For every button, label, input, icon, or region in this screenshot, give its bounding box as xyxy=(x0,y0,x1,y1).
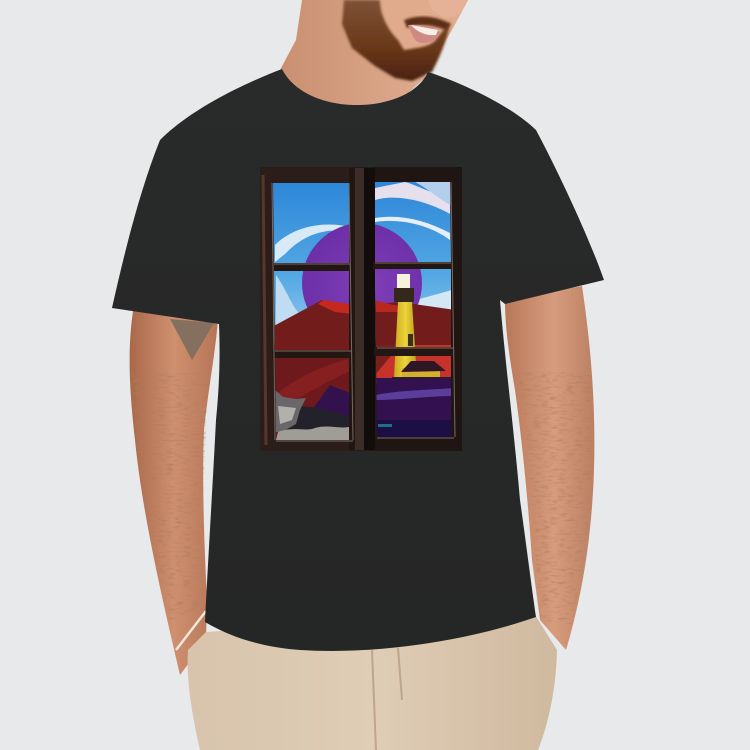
red hills xyxy=(274,300,451,350)
figure: man wearing t-shirt xyxy=(112,0,604,750)
bracelet xyxy=(176,611,206,650)
purple foreground xyxy=(376,378,451,428)
red ground right xyxy=(376,345,451,385)
cottage xyxy=(392,361,452,379)
frame highlights xyxy=(272,182,455,441)
right arm hair xyxy=(518,372,593,625)
window frame xyxy=(260,167,462,451)
glazing bars xyxy=(272,262,455,358)
tattoo xyxy=(170,319,214,360)
lighthouse xyxy=(392,274,452,379)
purple moon xyxy=(302,223,422,343)
cat xyxy=(275,390,353,440)
sky swirls xyxy=(275,224,345,262)
window backing xyxy=(260,167,462,451)
scene xyxy=(273,182,451,440)
nose xyxy=(428,0,466,18)
right arm xyxy=(505,286,594,650)
t-shirt xyxy=(112,69,604,651)
left arm xyxy=(130,305,218,675)
beard xyxy=(342,0,450,81)
central mullion xyxy=(349,168,375,450)
neck and chest xyxy=(280,0,450,108)
moustache xyxy=(404,17,451,30)
face: cheek xyxy=(375,0,468,60)
print: window scene xyxy=(260,167,462,451)
pants seam xyxy=(372,648,402,750)
lips xyxy=(408,25,440,43)
teeth xyxy=(411,25,438,35)
left arm hair xyxy=(131,372,210,620)
sky xyxy=(273,182,451,345)
pants xyxy=(188,610,557,750)
